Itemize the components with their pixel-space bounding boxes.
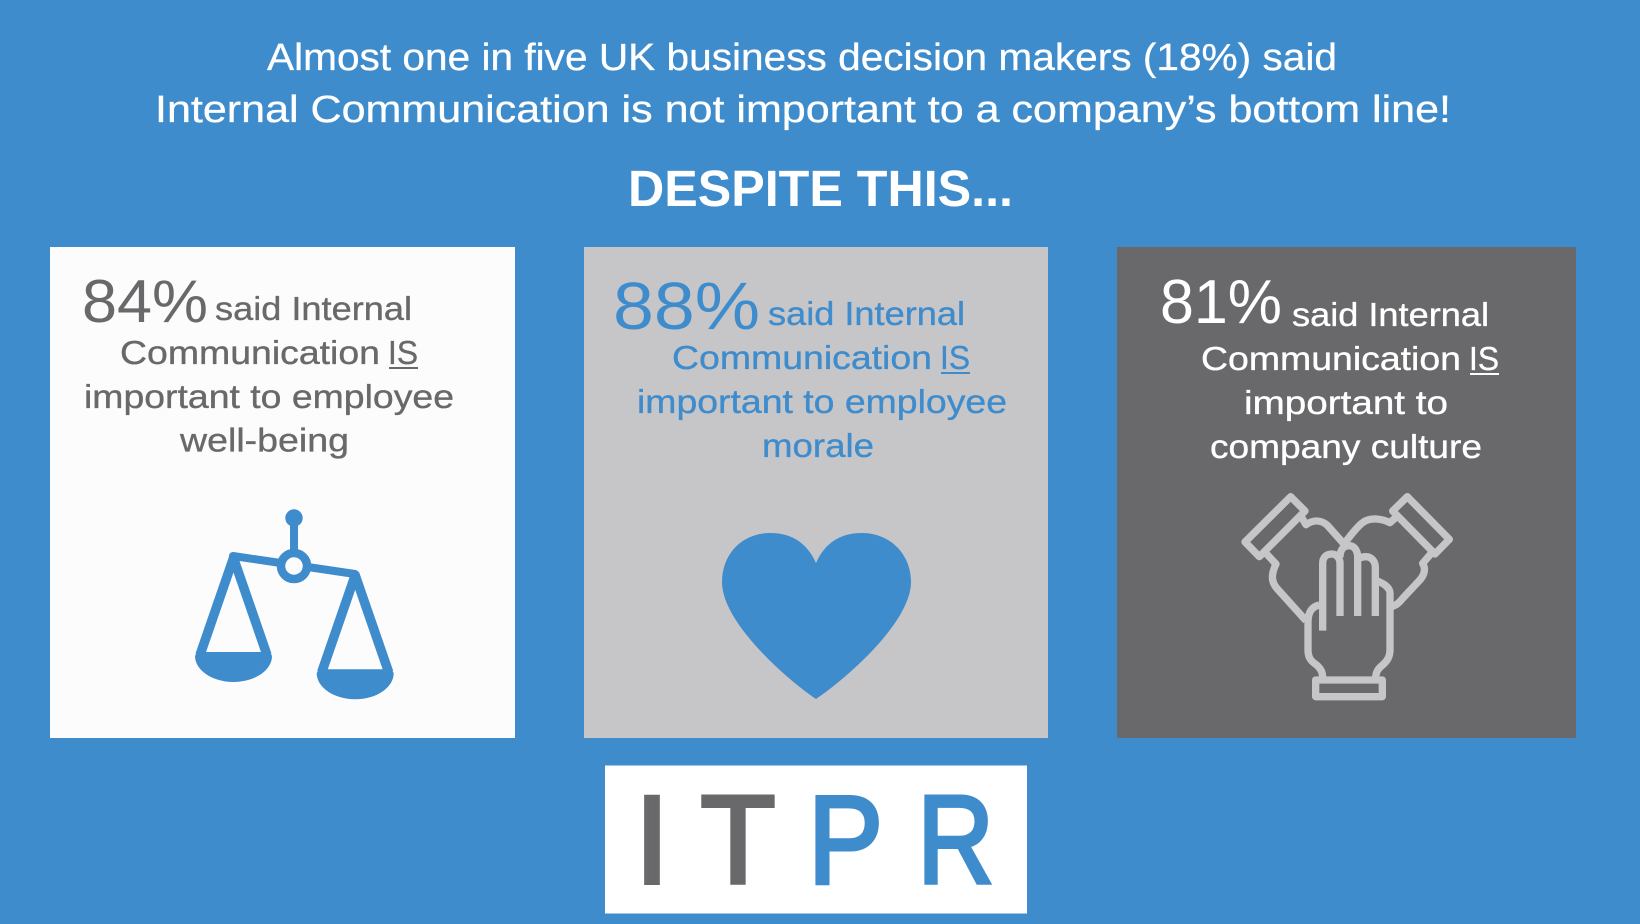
panel: well-being bbox=[50, 247, 515, 738]
text block: well-being statement: said Internal bbox=[215, 290, 412, 327]
logo: ITPR: R bbox=[917, 771, 994, 910]
text block: culture statement: Communication bbox=[1201, 340, 1461, 377]
title bbox=[155, 37, 1451, 131]
text block: well-being statement: IS bbox=[388, 334, 418, 371]
logo: ITPR: I bbox=[635, 771, 669, 910]
text block: morale statement: morale bbox=[762, 427, 874, 464]
icon: scales bbox=[195, 509, 394, 699]
text block: morale statement: IS bbox=[940, 339, 970, 376]
icon: three hands bbox=[1245, 497, 1449, 697]
text block: well-being statement: Communication bbox=[120, 334, 380, 371]
text block: culture statement: company culture bbox=[1210, 428, 1482, 465]
text block: morale statement: Communication bbox=[672, 339, 932, 376]
panel: culture bbox=[1117, 247, 1576, 738]
text block: culture statement: IS bbox=[1469, 340, 1499, 377]
text block: morale statement bbox=[637, 295, 1007, 464]
heading: despite this: DESPITE THIS... bbox=[628, 160, 1013, 217]
logo: ITPR: T bbox=[700, 771, 776, 910]
title: Internal Communication is not important to a company’s bottom line! bbox=[155, 89, 1451, 131]
stat: 88%: 88% bbox=[613, 269, 760, 344]
title: Almost one in five UK business decision makers (18%) said bbox=[267, 37, 1337, 79]
icon: heart bbox=[722, 533, 911, 699]
text block: culture statement: said Internal bbox=[1292, 296, 1489, 333]
text block: well-being statement: important to employee bbox=[84, 378, 454, 415]
text block: well-being statement bbox=[84, 290, 454, 458]
text block: morale statement: important to employee bbox=[637, 383, 1007, 420]
panel: morale bbox=[584, 247, 1048, 738]
text block: culture statement bbox=[1201, 296, 1499, 465]
stat: 84%: 84% bbox=[82, 268, 208, 335]
text block: morale statement: said Internal bbox=[768, 295, 965, 332]
stat: 81%: 81% bbox=[1160, 268, 1282, 337]
logo: ITPR: P bbox=[808, 771, 883, 910]
text block: well-being statement: well-being bbox=[179, 422, 349, 458]
text block: culture statement: important to bbox=[1244, 384, 1448, 421]
logo: ITPR bbox=[605, 766, 1027, 914]
